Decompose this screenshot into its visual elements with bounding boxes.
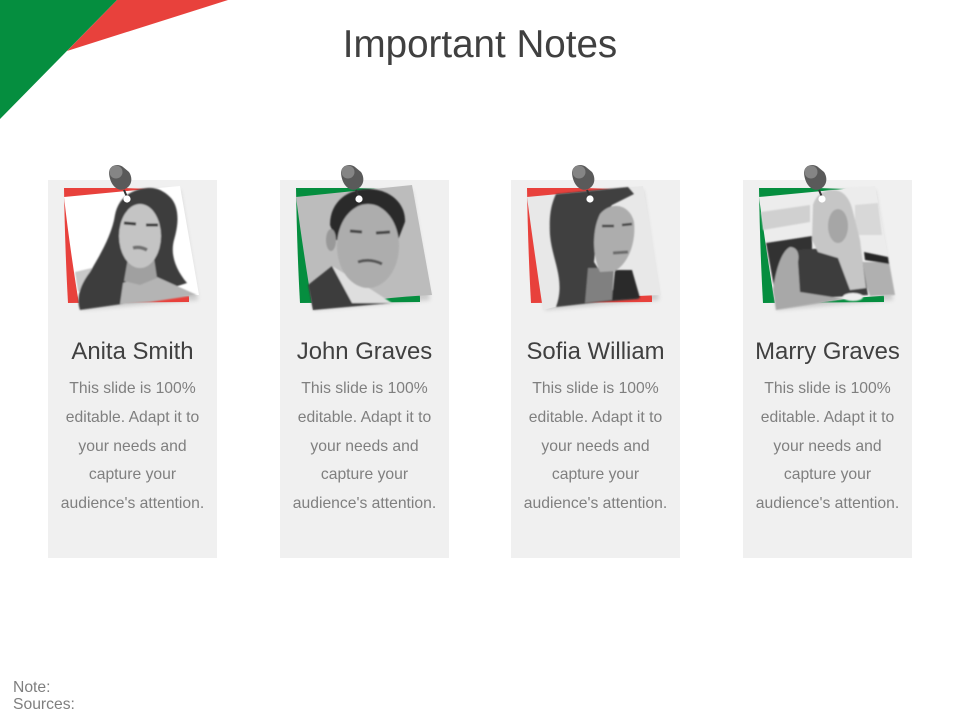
description <box>524 380 667 512</box>
footnote <box>13 679 75 713</box>
name: Sofia William <box>526 338 665 365</box>
icon: pin <box>341 165 363 203</box>
corner decoration <box>0 0 228 119</box>
description: This slide is 100% <box>69 380 196 397</box>
name: Anita Smith <box>71 338 194 365</box>
description: your needs and <box>310 438 419 454</box>
icon: pin <box>572 165 594 203</box>
description: editable. Adapt it to <box>529 409 662 426</box>
description: editable. Adapt it to <box>66 409 199 426</box>
description: editable. Adapt it to <box>761 409 894 426</box>
footnote: Sources: <box>13 696 75 713</box>
description: This slide is 100% <box>301 380 428 397</box>
description: This slide is 100% <box>532 380 659 397</box>
photo: Anita Smith <box>64 165 199 312</box>
description: your needs and <box>78 438 187 454</box>
description: capture your <box>552 466 639 483</box>
description: audience's attention. <box>756 495 899 512</box>
name: Marry Graves <box>755 338 900 365</box>
description: audience's attention. <box>61 495 204 512</box>
name: John Graves <box>297 338 432 365</box>
description <box>293 380 436 512</box>
description: capture your <box>321 466 408 483</box>
footnote: Note: <box>13 679 50 696</box>
panel: John Graves <box>280 165 449 558</box>
description: your needs and <box>541 438 650 454</box>
description: This slide is 100% <box>764 380 891 397</box>
icon: pin <box>804 165 826 203</box>
photo: John Graves <box>296 165 432 312</box>
description: editable. Adapt it to <box>298 409 431 426</box>
title: Important Notes <box>343 23 617 66</box>
description: audience's attention. <box>293 495 436 512</box>
icon: pin <box>109 165 131 203</box>
description: your needs and <box>773 438 882 454</box>
photo: Sofia William <box>527 165 660 311</box>
panel: Sofia William <box>511 165 680 558</box>
description <box>756 380 899 512</box>
panel: Anita Smith <box>48 165 217 558</box>
panel: Marry Graves <box>743 165 912 558</box>
description: capture your <box>784 466 871 483</box>
description: audience's attention. <box>524 495 667 512</box>
photo: Marry Graves <box>759 165 896 312</box>
description <box>61 380 204 512</box>
description: capture your <box>89 466 176 483</box>
